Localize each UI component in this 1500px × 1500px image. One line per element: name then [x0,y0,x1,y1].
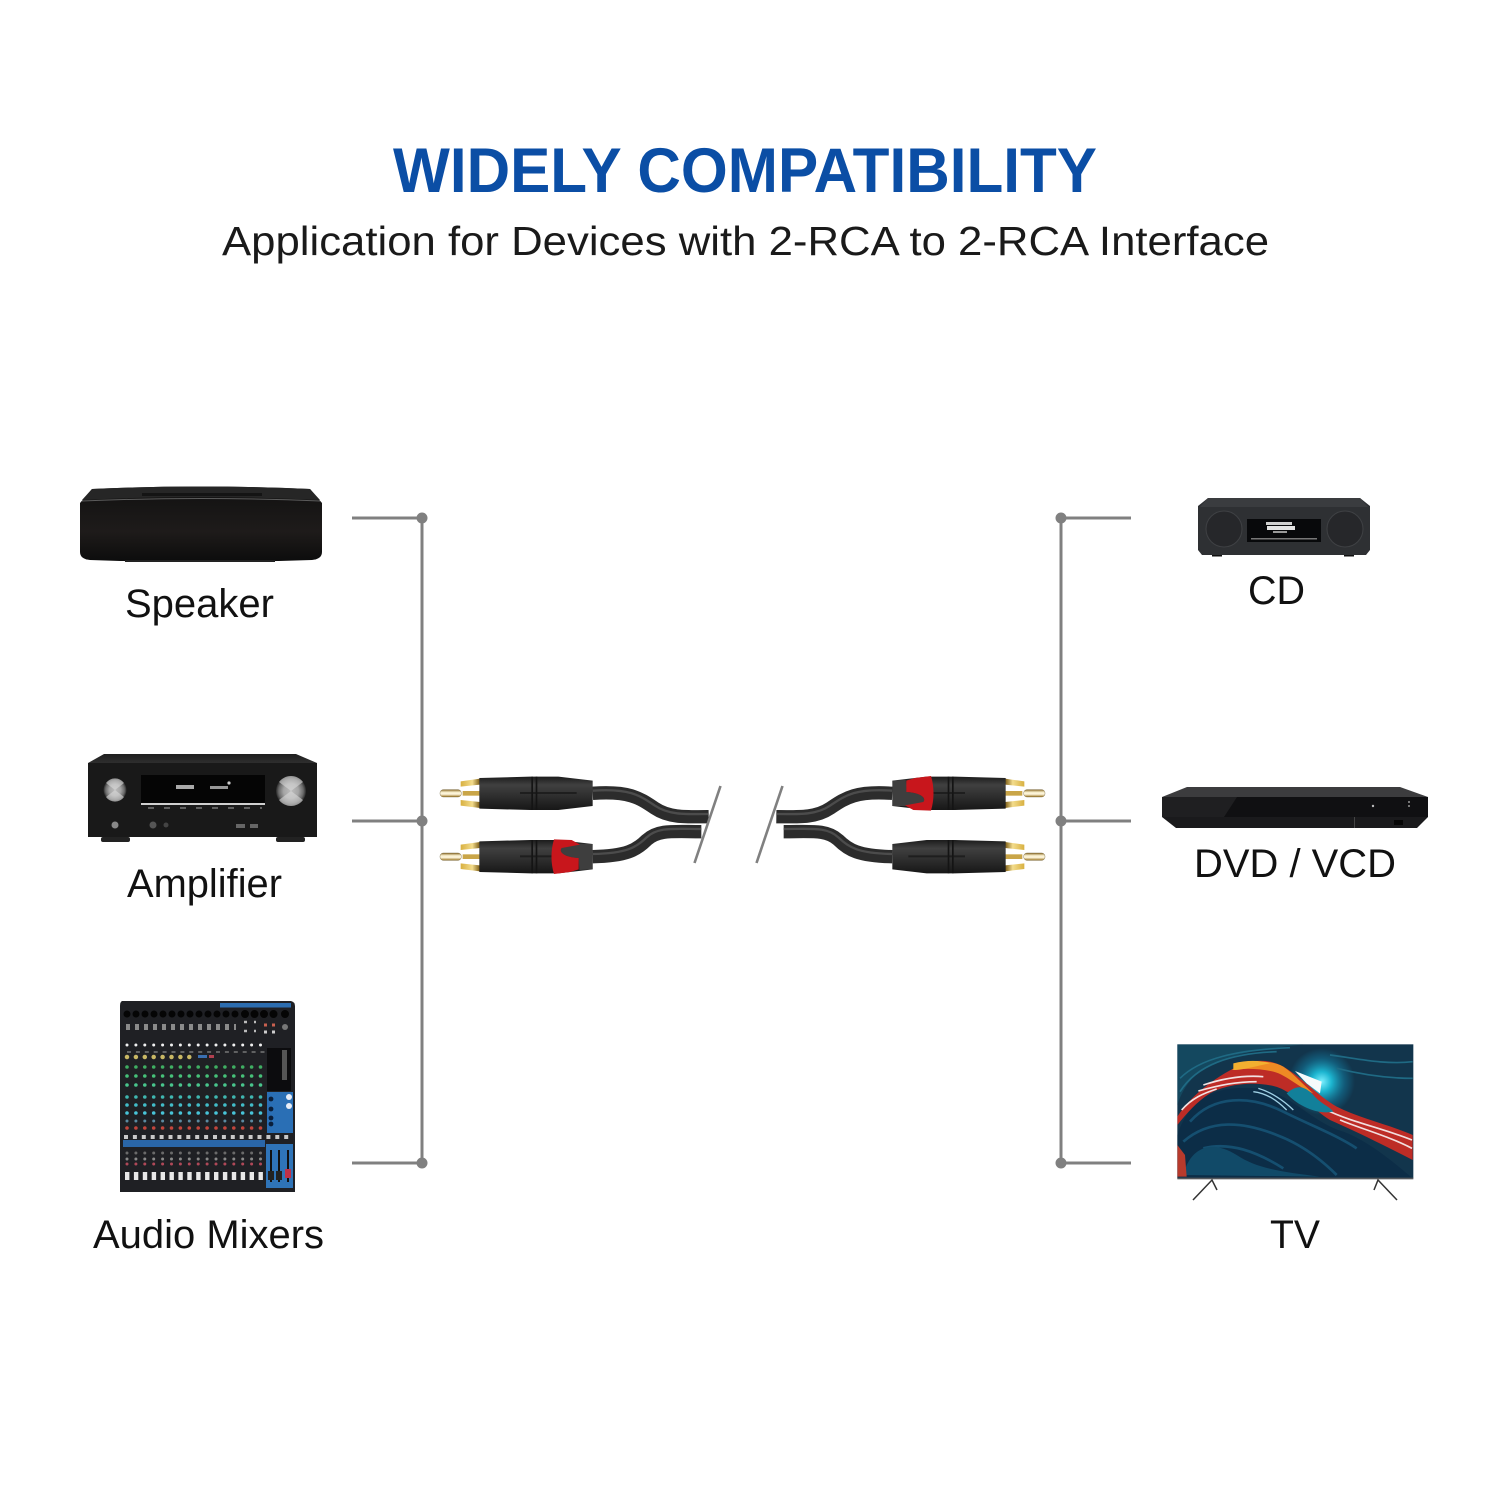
icon: TV [1177,1044,1413,1200]
bottom plug [892,840,1045,873]
red collar [551,839,592,874]
subtitle: Application for Devices with 2-RCA to 2-RCA Interface [222,218,1269,264]
label: DVD / VCD: DVD / VCD [1194,842,1396,886]
icon: amplifier [88,754,317,842]
cable ends [776,790,892,857]
label: Audio Mixers: Audio Mixers [93,1213,324,1257]
label: TV: TV [1270,1213,1320,1257]
right cable break mark [756,786,782,863]
right RCA cable [776,776,1045,873]
cable ends [593,790,709,857]
label: Amplifier: Amplifier [127,862,282,906]
red collar [893,776,934,811]
icon: DVD player [1162,787,1428,828]
bottom plug [440,840,593,873]
icon: speaker [80,486,322,562]
icon: audio mixer [120,1001,295,1192]
left cable break mark [694,786,720,863]
title: WIDELY COMPATIBILITY [393,136,1097,206]
left connector bracket [352,514,426,1167]
label: Speaker: Speaker [125,582,274,626]
top plug [440,777,593,810]
left RCA cable [440,777,709,874]
infographic canvas [80,148,1428,1248]
icon: CD player [1198,498,1370,556]
top plug [892,777,1045,810]
label: CD: CD [1248,569,1305,613]
right connector bracket [1057,514,1131,1167]
